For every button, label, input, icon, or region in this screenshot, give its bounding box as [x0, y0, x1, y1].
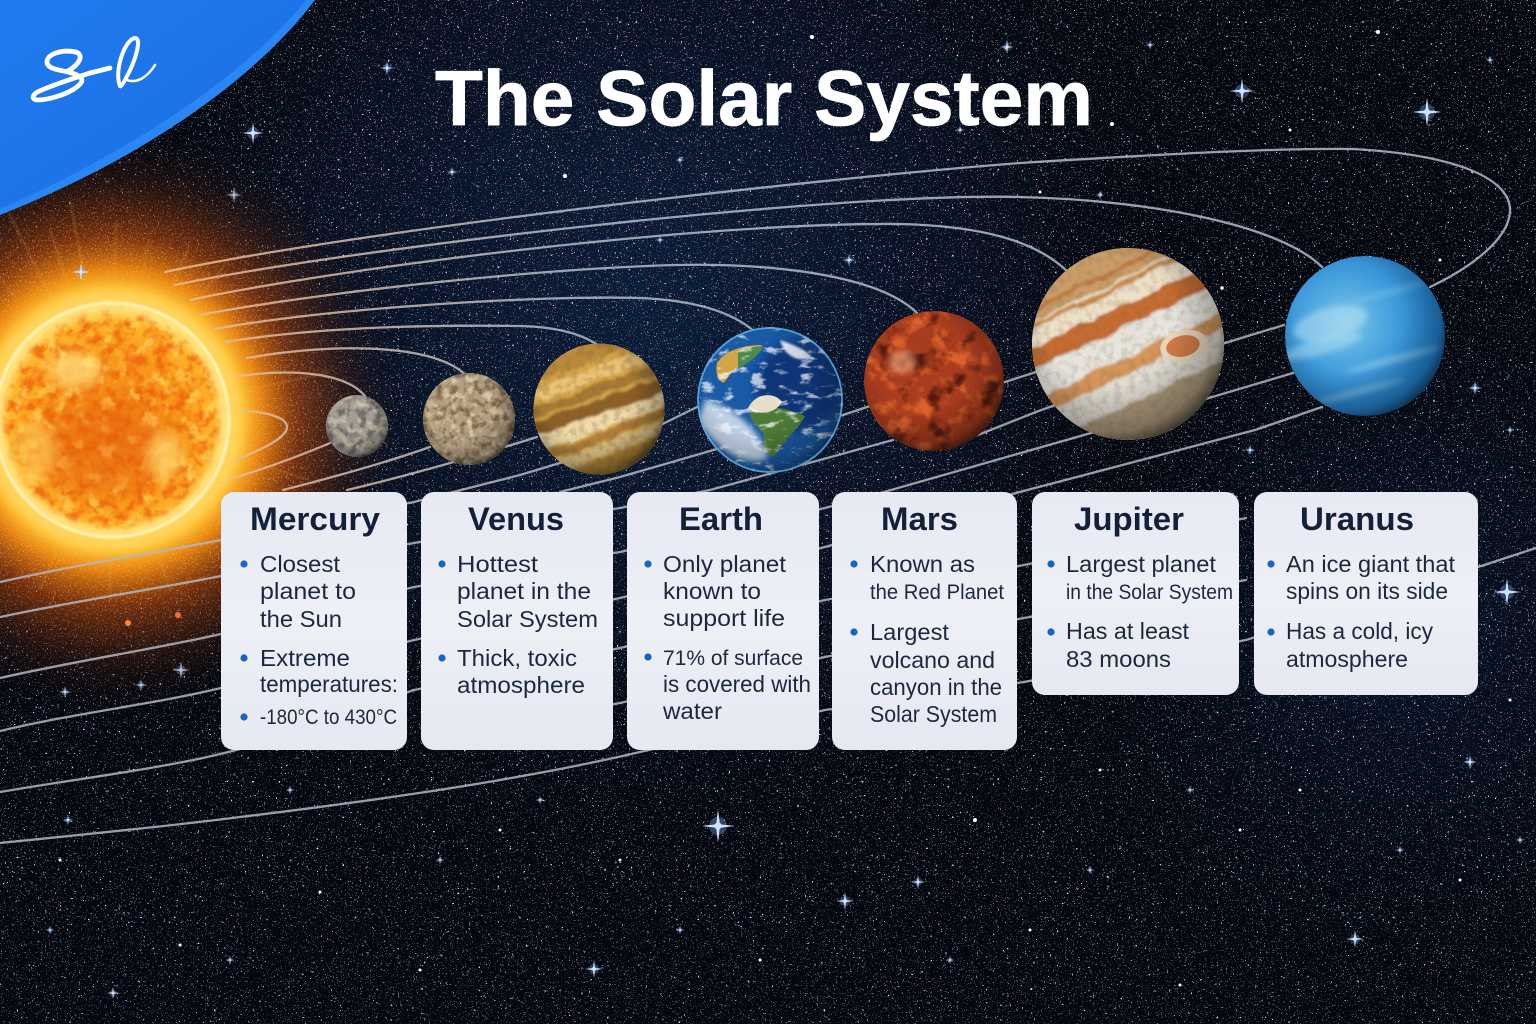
heading: Jupiter: Jupiter: [1074, 501, 1184, 537]
bullet list: Mars facts: the Red Planet: [870, 581, 1004, 604]
bullet list: Venus facts: Solar System: [457, 606, 598, 632]
planet: Venus (tan): [423, 373, 515, 465]
planet: Mercury: [326, 395, 388, 457]
bullet list: Mercury facts: [240, 551, 398, 729]
bullet list: Mars facts: Solar System: [870, 701, 997, 727]
title: The Solar System: [435, 54, 1093, 142]
planet: Uranus: [1285, 256, 1445, 416]
panel: Venus: [421, 492, 613, 750]
corner badge: [0, 0, 315, 215]
bullet list: Mars facts: [850, 551, 1004, 727]
heading: Venus: Venus: [468, 501, 564, 537]
orbit lines: [0, 149, 1536, 843]
bullet list: Mercury facts: temperatures:: [260, 671, 398, 697]
bullet list: Mars facts: canyon in the: [870, 674, 1002, 700]
bullet list: Venus facts: atmosphere: [457, 672, 585, 698]
bullet list: Mercury facts: Closest: [260, 551, 341, 577]
panel: Jupiter: [1032, 492, 1239, 695]
sun: [0, 292, 240, 548]
bullet list: Uranus facts: [1267, 551, 1456, 672]
bullet list: Earth facts: is covered with: [663, 671, 811, 697]
bullet list: Jupiter facts: Has at least: [1066, 618, 1190, 644]
bullet list: Mercury facts: the Sun: [260, 606, 342, 632]
bullet list: Mercury facts: planet to: [260, 578, 356, 604]
bullet list: Venus facts: planet in the: [457, 578, 591, 604]
bullet list: Jupiter facts: 83 moons: [1066, 646, 1171, 672]
icon: signature logo: [33, 38, 155, 100]
bullet list: Venus facts: [438, 551, 598, 698]
planet: golden: [534, 344, 664, 474]
bullet list: Jupiter facts: [1047, 551, 1233, 672]
planet: Mars: [864, 311, 1004, 451]
bullet list: Earth facts: known to: [663, 578, 761, 604]
heading: Uranus: Uranus: [1300, 501, 1414, 537]
bullet list: Mercury facts: -180°C to 430°C: [260, 706, 397, 729]
bullet list: Mars facts: Known as: [870, 551, 975, 577]
bullet list: Earth facts: support life: [663, 605, 785, 631]
bullet list: Mercury facts: Extreme: [260, 645, 350, 671]
bullet list: Mars facts: volcano and: [870, 647, 995, 673]
bullet list: Uranus facts: Has a cold, icy: [1286, 618, 1433, 644]
panel: Mars: [832, 492, 1017, 750]
bullet list: Mars facts: Largest: [870, 619, 950, 645]
planet: Earth: [697, 327, 845, 473]
heading: Mars: Mars: [881, 501, 958, 537]
bullet list: Venus facts: Thick, toxic: [457, 645, 577, 671]
bullet list: Uranus facts: An ice giant that: [1286, 551, 1456, 577]
heading: Earth: Earth: [679, 501, 763, 537]
heading: Mercury: Mercury: [250, 501, 380, 537]
bullet list: Jupiter facts: in the Solar System: [1066, 581, 1233, 604]
bullet list: Uranus facts: spins on its side: [1286, 578, 1448, 604]
planet: Jupiter: [1032, 248, 1224, 440]
panel: Uranus: [1254, 492, 1478, 695]
bullet list: Earth facts: [644, 551, 811, 724]
panel: Mercury: [221, 492, 407, 750]
bullet list: Earth facts: water: [662, 698, 722, 724]
panel: Earth: [627, 492, 819, 750]
sun glow: [0, 130, 410, 710]
bullet list: Jupiter facts: Largest planet: [1066, 551, 1217, 577]
bullet list: Earth facts: Only planet: [663, 551, 787, 577]
bullet list: Uranus facts: atmosphere: [1286, 646, 1408, 672]
bullet list: Venus facts: Hottest: [457, 551, 539, 577]
bullet list: Earth facts: 71% of surface: [663, 647, 803, 670]
